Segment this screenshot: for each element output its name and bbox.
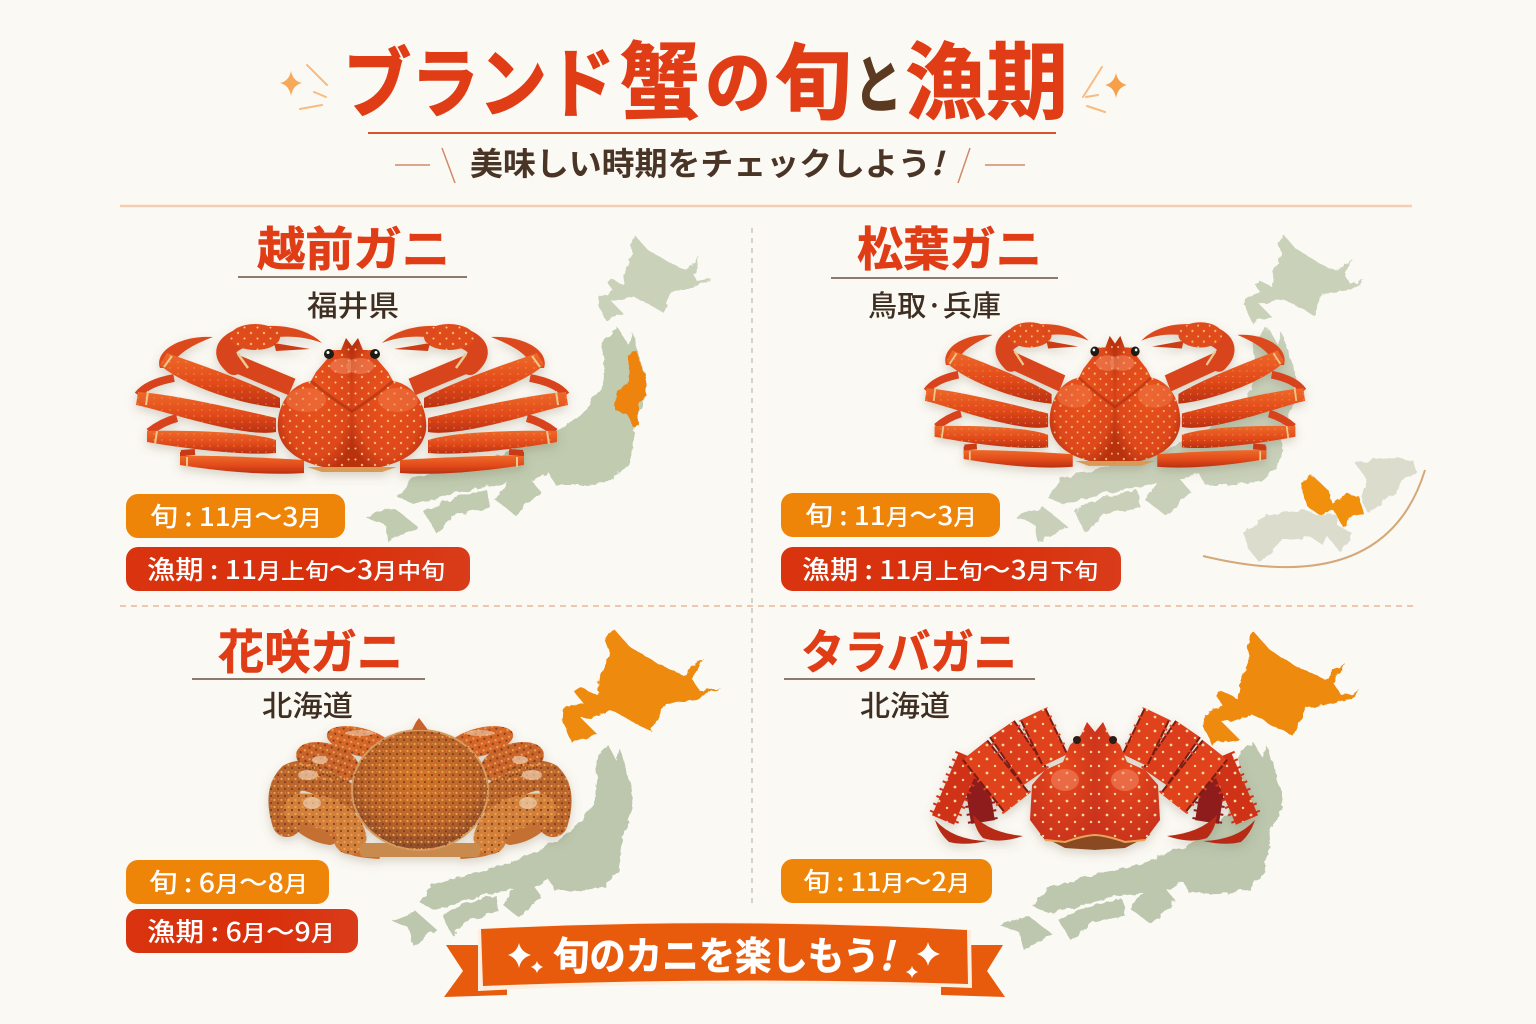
icon: snow crab: [136, 324, 568, 474]
season badge: [781, 859, 992, 903]
panel: echizen crab: [126, 211, 712, 591]
map: Hokkaido highlighted: [392, 628, 720, 945]
heading: タラバガニ: [801, 614, 1017, 683]
season badge: 旬 : 6 月～8月: [149, 863, 308, 900]
title: [343, 16, 1068, 137]
icon: king crab: [935, 714, 1255, 850]
fishing period badge: [126, 909, 358, 953]
title: 旬: [775, 17, 851, 136]
title: 漁期: [905, 16, 1068, 137]
prefecture: 鳥取·兵庫: [868, 283, 1001, 325]
title: と: [854, 35, 902, 125]
prefecture: 北海道: [860, 683, 950, 725]
season badge: 旬 : 11 月～3月: [805, 496, 977, 533]
title: 蟹: [620, 16, 700, 137]
title: の: [705, 28, 771, 127]
banner sparkles: [508, 942, 940, 978]
heading: 越前ガニ: [257, 211, 450, 280]
prefecture: 北海道: [262, 683, 353, 725]
fishing period badge: 漁期 : 6 月～9月: [147, 912, 335, 949]
banner text: 旬のカニを楽しもう!: [553, 926, 896, 982]
map: Hokkaido highlighted: [1000, 632, 1361, 950]
season badge: [126, 860, 329, 904]
season badge: [781, 493, 1000, 537]
map: Japan with Fukui highlighted: [365, 235, 712, 543]
inset arc: [1203, 470, 1425, 567]
panel: taraba crab: [781, 614, 1361, 950]
panel: matsuba crab: [781, 211, 1425, 591]
prefecture: 福井県: [307, 283, 399, 325]
panel: hanasaki crab: [126, 614, 720, 953]
season badge: 旬 : 11月～2月: [803, 862, 970, 899]
icon: snow crab: [925, 322, 1305, 468]
map: Japan with inset: [1015, 235, 1418, 563]
season badge: [126, 494, 345, 538]
title: ブランド: [343, 23, 615, 133]
heading: 松葉ガニ: [857, 211, 1042, 280]
fishing period badge: 漁期 : 11 月上旬～3月下旬: [802, 550, 1098, 587]
heading: 花咲ガニ: [218, 614, 403, 683]
season badge: 旬 : 11 月～3月: [150, 497, 322, 534]
fishing period badge: 漁期 : 11 月上旬～3月中旬: [147, 550, 445, 587]
title rule: [368, 132, 1056, 134]
title sparkles: [280, 65, 1127, 112]
icon: hanasaki crab: [283, 718, 557, 857]
subtitle: 美味しい時期をチェックしよう !: [470, 139, 946, 185]
banner: [444, 922, 1005, 997]
